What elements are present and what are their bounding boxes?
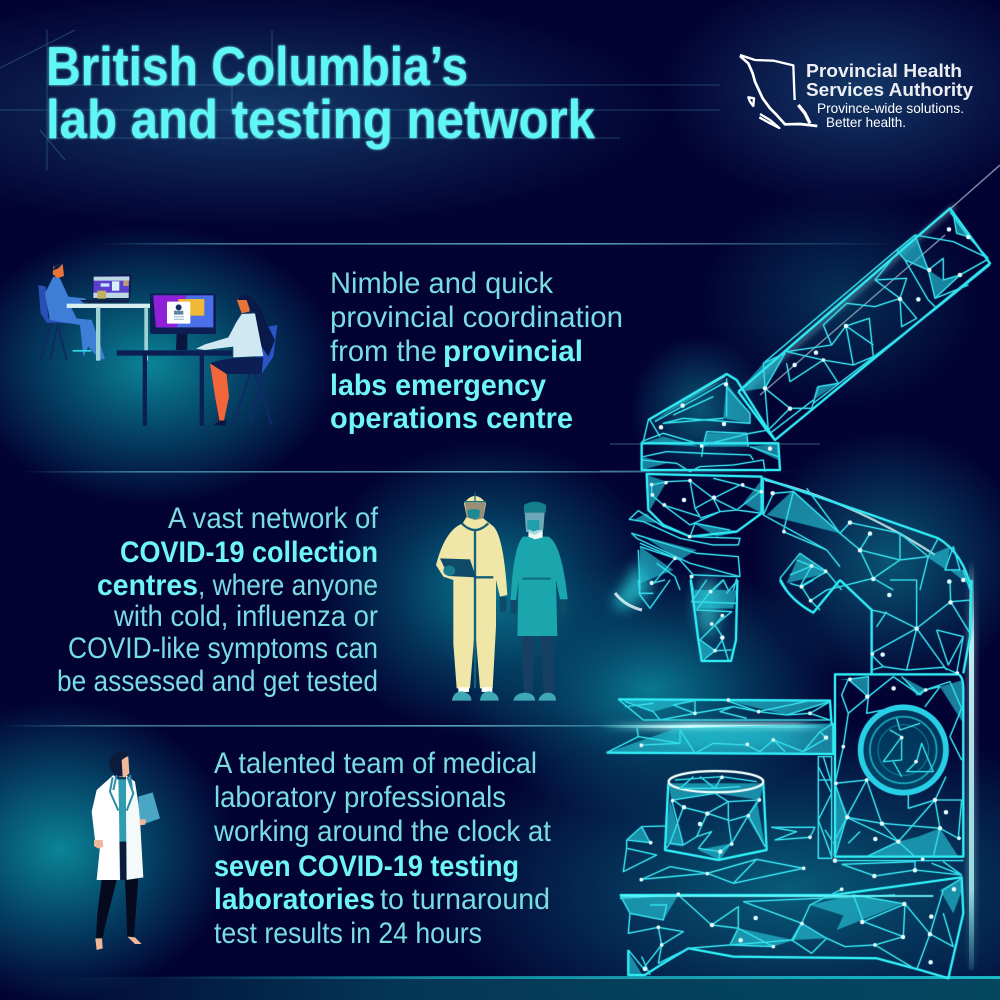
head and hair — [119, 757, 129, 777]
tube lines — [738, 208, 990, 440]
title — [46, 35, 595, 150]
text: provincial coordination: provincial — [443, 335, 583, 368]
arm lines — [763, 478, 972, 590]
text: laboratory professionals: working around the clock at — [213, 815, 552, 848]
woman at monitor — [196, 295, 277, 426]
text: laboratory professionals: seven COVID-19 testing — [214, 850, 519, 883]
text: collection centres: be assessed and get tested — [57, 665, 378, 698]
knob lower — [780, 580, 840, 613]
bottom band — [0, 976, 1000, 1000]
text: provincial coordination — [330, 267, 623, 435]
title: British Columbia’s — [46, 35, 468, 97]
text: collection centres: , where anyone — [198, 569, 378, 602]
central objective — [691, 580, 737, 661]
legs — [96, 878, 138, 938]
stage upper — [618, 699, 832, 725]
icon: BC map outline — [740, 55, 817, 128]
microscope glow lights — [600, 165, 1000, 970]
left objective stub — [638, 580, 670, 608]
illustration: two workers in protective equipment — [436, 493, 568, 701]
focus knob lines — [780, 553, 842, 590]
cylinder — [665, 771, 767, 860]
man at laptop — [38, 263, 105, 360]
text: collection centres: COVID-like symptoms can — [68, 632, 378, 665]
body box — [835, 674, 963, 857]
logo: Provincial Health Services Authority: Better health. — [826, 114, 906, 130]
illustration: two people working at computers — [38, 263, 277, 426]
header grid lines — [0, 30, 720, 170]
torso and coat — [118, 779, 127, 842]
head lines — [642, 374, 780, 470]
logo: Provincial Health Services Authority: Services Authority — [806, 80, 973, 100]
nosepiece lines — [647, 474, 762, 537]
text: provincial coordination: Nimble and quick — [330, 267, 554, 300]
text: collection centres: COVID-19 collection — [120, 536, 378, 569]
title: lab and testing network — [46, 88, 595, 150]
filled facets — [607, 590, 963, 977]
base — [620, 877, 963, 978]
stage support column — [818, 757, 832, 858]
dots — [640, 580, 961, 971]
microscope lower: objectives, stage, body, base — [607, 580, 972, 978]
text: laboratory professionals: to turnaround — [380, 883, 550, 916]
section divider lines — [0, 243, 900, 727]
text: laboratory professionals: laboratory professionals — [214, 781, 506, 814]
illustration: doctor in white lab coat — [92, 751, 160, 950]
logo: Provincial Health Services Authority: Province-wide solutions. — [817, 100, 964, 116]
arm lower — [840, 580, 972, 673]
text: laboratory professionals: A talented team of medical — [214, 747, 537, 780]
hands — [94, 819, 146, 849]
nose rings — [629, 511, 740, 590]
monitor and front desk — [117, 293, 232, 426]
text: collection centres — [57, 502, 379, 698]
feet — [95, 937, 142, 950]
text: collection centres: with cold, influenza or — [113, 600, 378, 633]
text: provincial coordination: operations centre — [330, 402, 573, 435]
small stand fragments — [623, 826, 963, 883]
filled facets — [633, 213, 968, 583]
text: collection centres: centres — [97, 569, 198, 602]
microscope — [600, 165, 1000, 978]
text: provincial coordination: provincial coordination — [330, 301, 623, 334]
text: provincial coordination: from the — [330, 335, 437, 368]
text: laboratory professionals — [213, 747, 552, 950]
text: laboratory professionals: test results in 24 hours — [214, 917, 482, 950]
stage lower — [607, 723, 833, 754]
desk and laptop — [67, 274, 151, 361]
worker in teal gown — [511, 502, 568, 701]
text: collection centres: A vast network of — [168, 502, 379, 535]
logo: Provincial Health Services Authority: Provincial Health — [806, 61, 962, 81]
microscope upper: eyepiece tube, head, nosepiece — [629, 208, 990, 590]
worker in yellow coverall — [436, 493, 507, 701]
dots — [650, 227, 970, 588]
text: laboratory professionals: laboratories — [214, 883, 375, 916]
logo: Provincial Health Services Authority — [740, 55, 973, 130]
text: provincial coordination: labs emergency — [330, 369, 546, 402]
clipboard — [138, 792, 160, 823]
body ring — [861, 707, 946, 793]
